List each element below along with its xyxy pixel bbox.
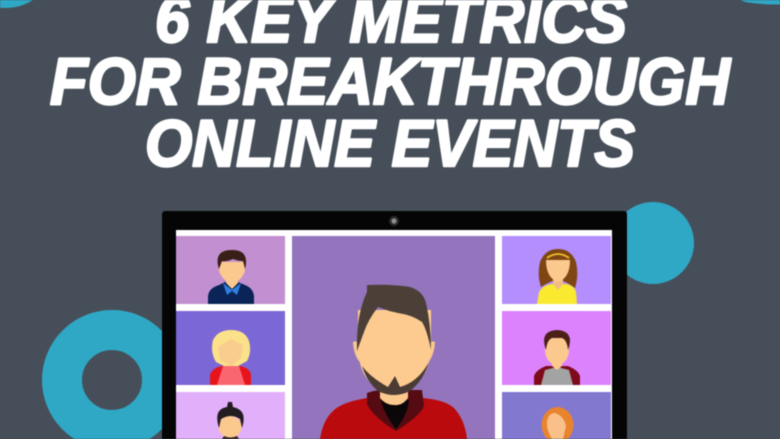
decoration: teal ring	[62, 330, 162, 430]
face	[358, 310, 431, 395]
tile: man in navy sweater	[176, 236, 285, 304]
undershirt	[381, 400, 409, 429]
decoration: teal circle behind laptop	[612, 202, 694, 284]
video call screen frame	[162, 211, 627, 439]
sweater	[320, 398, 467, 439]
decoration: top right teal circle	[740, 0, 780, 4]
tile: man in grey shirt	[502, 311, 611, 385]
tile: woman in yellow	[502, 236, 611, 304]
title: FOR BREAKTHROUGH	[50, 44, 731, 118]
title: ONLINE EVENTS	[145, 106, 635, 180]
tile: man with hair bun	[176, 392, 285, 439]
tile: red-haired woman	[502, 392, 611, 439]
collar	[367, 390, 424, 431]
tile: main speaker	[292, 236, 495, 439]
beard	[362, 362, 429, 395]
title	[50, 0, 731, 180]
tile: blonde woman	[176, 311, 285, 385]
neck	[380, 388, 408, 405]
ears	[353, 341, 362, 364]
decoration: top left teal circle	[0, 0, 58, 8]
hair	[357, 285, 431, 351]
